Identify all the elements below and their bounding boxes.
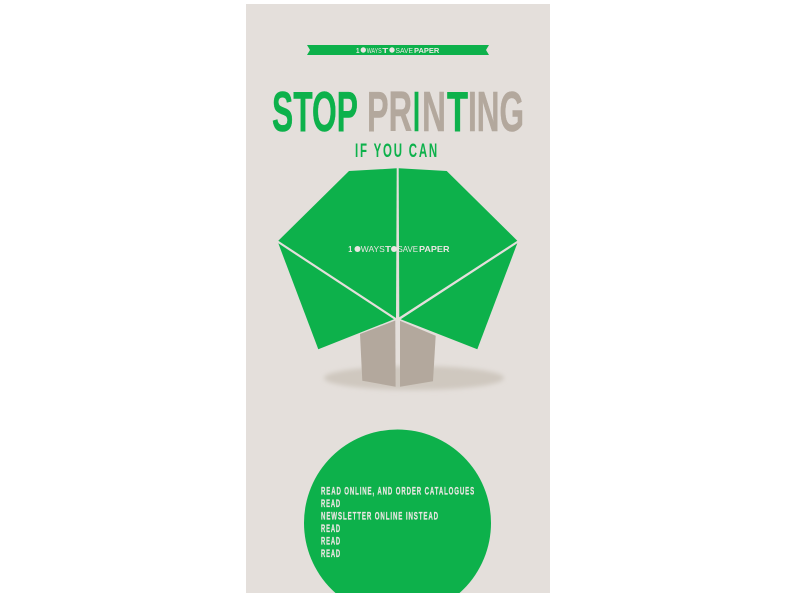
ribbon text: T bbox=[382, 46, 389, 55]
panel: paper background bbox=[246, 4, 550, 593]
title: stop printing: T bbox=[447, 80, 468, 144]
ribbon text: WAYS bbox=[367, 46, 382, 55]
ribbon banner bbox=[307, 45, 489, 55]
canopy text: PAPER bbox=[419, 244, 450, 254]
canopy text: WAYS bbox=[361, 244, 385, 254]
circle text list: READ bbox=[321, 523, 341, 535]
circle text list: READ bbox=[321, 548, 341, 560]
canopy text: SAVE bbox=[398, 244, 418, 254]
title: stop printing: N bbox=[422, 80, 446, 144]
circle text list: NEWSLETTER ONLINE INSTEAD bbox=[321, 510, 439, 522]
circle text list bbox=[321, 486, 475, 560]
circle text list: READ bbox=[321, 536, 341, 548]
circle text list: READ bbox=[321, 498, 341, 510]
title: stop printing: PR bbox=[367, 80, 412, 144]
ground shadow bbox=[324, 366, 504, 390]
circle text list: READ ONLINE, AND ORDER CATALOGUES bbox=[321, 486, 475, 498]
ribbon text: SAVE bbox=[396, 46, 413, 55]
ribbon text: PAPER bbox=[414, 46, 440, 55]
title: stop printing: I bbox=[413, 80, 420, 144]
canopy text bbox=[348, 244, 450, 254]
canopy text: T bbox=[385, 244, 392, 254]
ribbon text: 1 bbox=[356, 46, 360, 55]
ribbon text bbox=[356, 46, 440, 55]
title: stop printing: STOP bbox=[272, 80, 358, 144]
green circle panel bbox=[304, 430, 491, 600]
tree trunk bbox=[360, 320, 436, 387]
title: stop printing: ING bbox=[468, 80, 524, 144]
subtitle: IF YOU CAN bbox=[355, 141, 439, 162]
canopy text: 1 bbox=[348, 244, 353, 254]
tree canopy bbox=[278, 168, 517, 349]
title: stop printing bbox=[272, 80, 524, 144]
